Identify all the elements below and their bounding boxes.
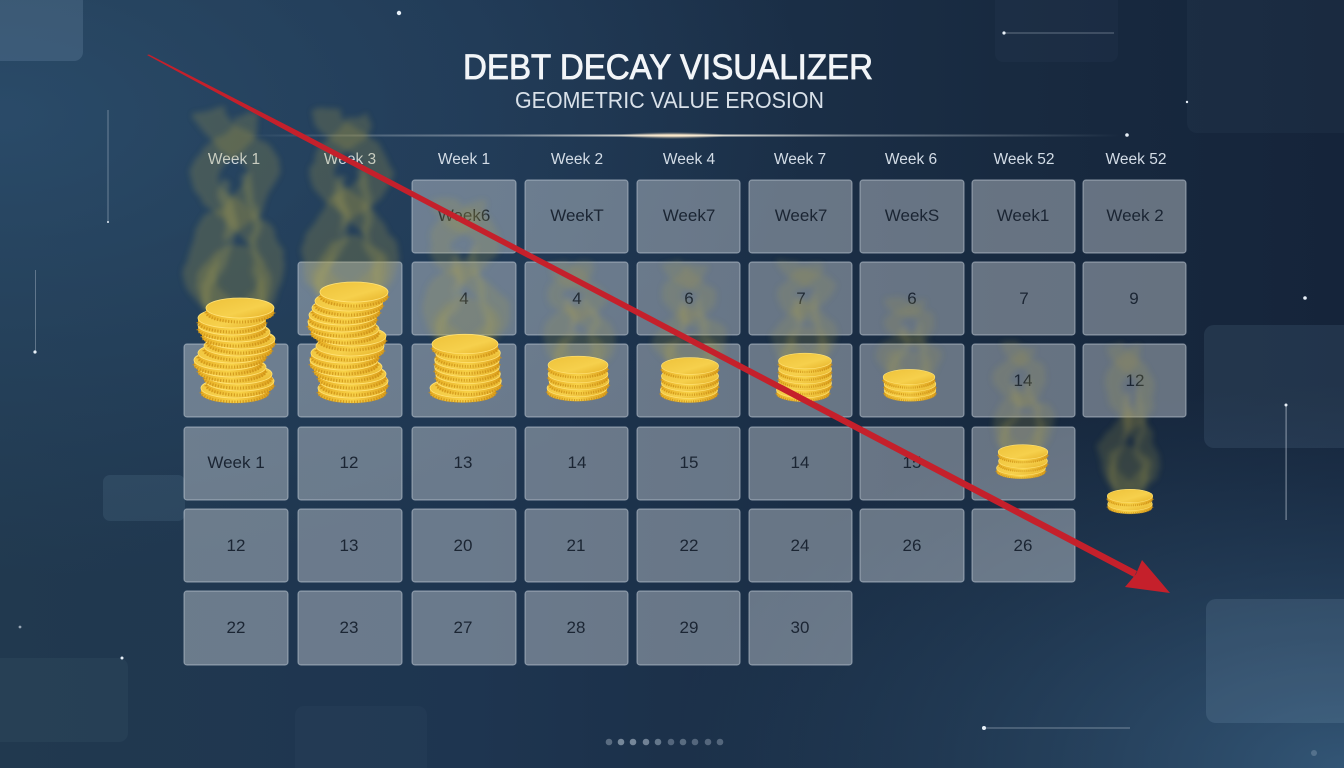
row 1: Week1: [997, 206, 1049, 225]
row 3: 12: [1126, 371, 1144, 390]
row 3: [184, 344, 1186, 417]
coin stack 8: [997, 445, 1048, 479]
row 4: Week 1: [207, 453, 265, 472]
row 6: [184, 591, 852, 665]
row 4: 14: [568, 453, 586, 472]
coin stack 2: [308, 282, 388, 403]
row 5: 26: [1014, 536, 1032, 555]
row 5: 26: [903, 536, 921, 555]
column headers: Week 6: [885, 151, 937, 168]
row 5: 12: [227, 536, 245, 555]
column headers: Week 1: [438, 151, 490, 168]
row 1: [412, 180, 1186, 253]
row 2: 7: [1019, 289, 1029, 308]
pagination dots: [606, 739, 723, 745]
row 5: 24: [791, 536, 809, 555]
row 6: 23: [340, 618, 358, 637]
row 1: Week 2: [1106, 206, 1164, 225]
coin stack 3: [430, 334, 501, 403]
row 5: 20: [454, 536, 472, 555]
row 2: 4: [572, 289, 582, 308]
row 4: 13: [454, 453, 472, 472]
glowing divider: [240, 132, 1120, 139]
row 2: 6: [907, 289, 917, 308]
column headers: Week 4: [663, 151, 716, 168]
red decline arrow: [147, 54, 1170, 593]
row 2: [298, 262, 1186, 335]
row 6: 30: [791, 618, 809, 637]
column headers: Week 52: [994, 151, 1054, 168]
row 4: 15: [903, 453, 921, 472]
coin stack 1: [194, 298, 275, 403]
row 6: 29: [680, 618, 698, 637]
row 5: [184, 509, 1075, 582]
coin stack 5: [660, 358, 719, 403]
row 1: Week7: [775, 206, 827, 225]
row 4: [184, 427, 1075, 500]
row 5: 21: [567, 536, 585, 555]
row 5: 13: [340, 536, 358, 555]
column headers: Week 1: [208, 151, 260, 168]
row 6: 28: [567, 618, 585, 637]
coin stack 7: [883, 369, 936, 401]
row 2: 4: [459, 289, 469, 308]
row 4: 14: [791, 453, 809, 472]
calendar grid: [184, 180, 1186, 665]
subtitle: GEOMETRIC VALUE EROSION: [515, 87, 824, 113]
row 1: WeekS: [885, 206, 939, 225]
row 6: 27: [454, 618, 472, 637]
row 2: 9: [1129, 289, 1139, 308]
row 1: WeekT: [550, 206, 604, 225]
column headers: Week 7: [774, 151, 826, 168]
coin stack 4: [547, 356, 609, 401]
golden smoke rising from coin stacks: [198, 108, 1152, 497]
row 4: 15: [680, 453, 698, 472]
title: DEBT DECAY VISUALIZER: [463, 48, 873, 87]
coin stack 6: [776, 353, 832, 402]
coin stack 9: [1107, 489, 1153, 514]
row 5: 22: [680, 536, 698, 555]
column headers: Week 52: [1106, 151, 1166, 168]
column headers: [208, 151, 1166, 168]
column headers: Week 2: [551, 151, 603, 168]
row 6: 22: [227, 618, 245, 637]
row 2: 7: [796, 289, 806, 308]
row 1: Week7: [663, 206, 715, 225]
row 1: Week6: [438, 206, 490, 225]
row 2: 6: [684, 289, 694, 308]
column headers: Week 3: [324, 151, 376, 168]
row 4: 12: [340, 453, 358, 472]
row 3: 14: [1014, 371, 1032, 390]
